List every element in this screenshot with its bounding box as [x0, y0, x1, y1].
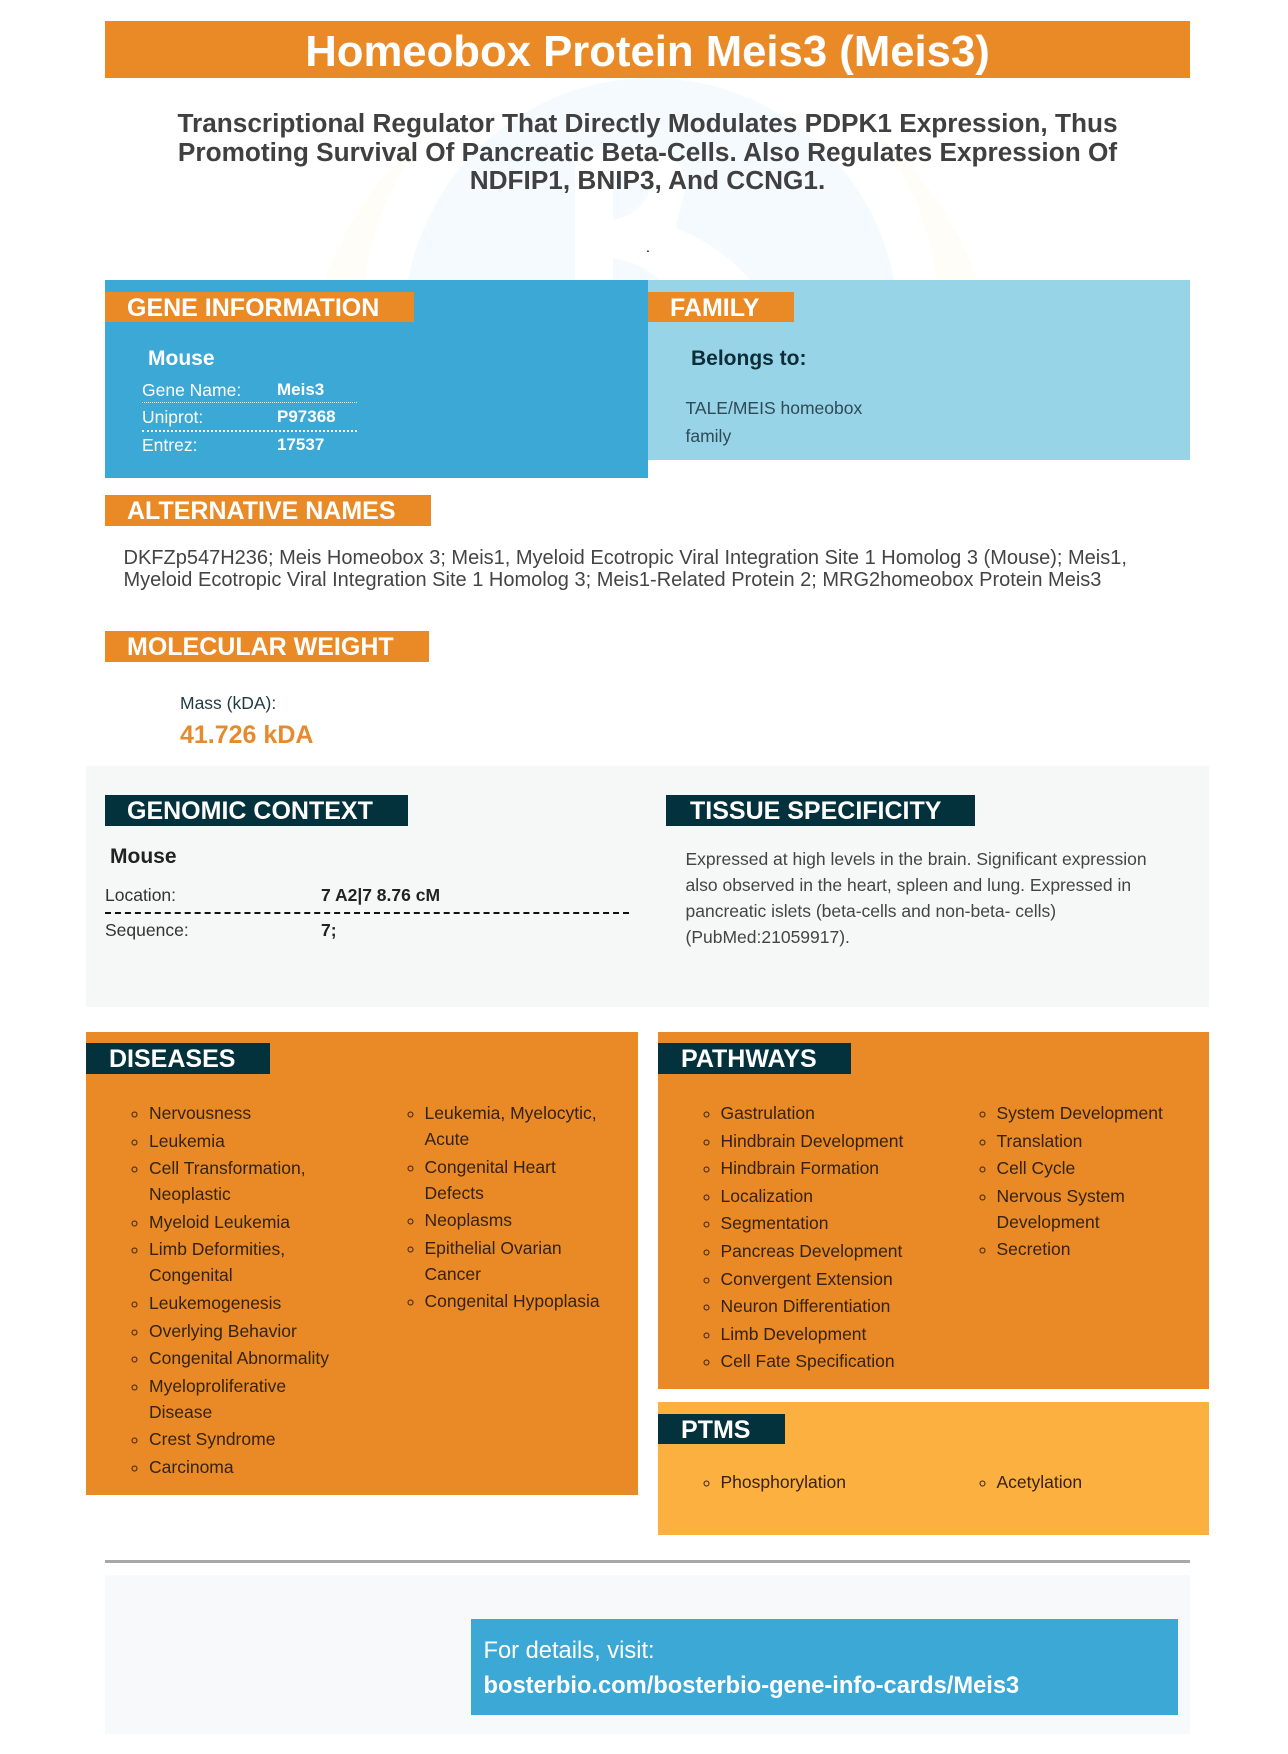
list: pathways column 1 [704, 1103, 904, 1371]
list: pathways column 2: Cell Cycle [996, 1158, 1075, 1178]
gene name row: Gene Name: [142, 380, 241, 400]
list: diseases column 1: Carcinoma [149, 1457, 234, 1477]
heading: genomic context: GENOMIC CONTEXT [127, 797, 373, 825]
title banner [105, 21, 1190, 78]
list: diseases column 2: Neoplasms [424, 1210, 512, 1230]
panel: gene information [105, 280, 648, 478]
alternative names text: Myeloid Ecotropic Viral Integration Site 1 Homolog 3; Meis1-Related Protein 2; MRG2homeobox Protein Meis3 [124, 569, 1101, 591]
list: pathways column 1: Hindbrain Formation [720, 1158, 879, 1178]
heading: pathways [658, 1043, 851, 1074]
species label: Mouse [148, 347, 215, 370]
sequence row: 7; [321, 920, 337, 940]
list: pathways column 1: Segmentation [720, 1213, 828, 1233]
list: pathways column 1: Gastrulation [720, 1103, 815, 1123]
location row [105, 882, 629, 914]
location row: Location: [105, 885, 176, 905]
family text: family [686, 426, 731, 446]
heading: tissue specificity: TISSUE SPECIFICITY [690, 797, 941, 825]
tissue specificity text [686, 849, 1147, 947]
heading: molecular weight: MOLECULAR WEIGHT [127, 633, 394, 661]
subtitle: Promoting Survival Of Pancreatic Beta-Cells. Also Regulates Expression Of [178, 137, 1117, 167]
list: diseases column 1: Myeloid Leukemia [149, 1212, 290, 1232]
mass label: Mass (kDA): [180, 693, 276, 713]
entrez row: 17537 [277, 435, 324, 454]
entrez row: Entrez: [142, 435, 197, 455]
list: diseases column 2: Congenital Heart Defects [424, 1157, 556, 1203]
callout: details link [471, 1619, 1178, 1715]
list: diseases column 1: Leukemia [149, 1131, 225, 1151]
list: pathways column 1: Cell Fate Specification [720, 1351, 895, 1371]
list: pathways column 2 [980, 1103, 1163, 1259]
list: diseases column 2: Epithelial Ovarian Cancer [424, 1238, 562, 1284]
heading: PTMs: PTMS [681, 1416, 750, 1444]
background watermark logo [408, 78, 894, 280]
family text: TALE/MEIS homeobox [686, 398, 862, 418]
list: pathways column 2: Nervous System Development [996, 1186, 1125, 1232]
list: pathways column 1: Convergent Extension [720, 1269, 893, 1289]
footer divider [105, 1560, 1190, 1563]
gene name row [142, 377, 357, 403]
belongs to label: Belongs to: [691, 347, 806, 370]
list: diseases column 1: Crest Syndrome [149, 1429, 275, 1449]
tissue specificity text: (PubMed:21059917). [686, 927, 850, 947]
list: pathways column 1: Neuron Differentiation [720, 1296, 890, 1316]
panel: genomic context and tissue specificity [86, 766, 1209, 1007]
heading: family: FAMILY [670, 294, 759, 322]
uniprot row [142, 404, 357, 432]
list: diseases column 1: Leukemogenesis [149, 1293, 281, 1313]
heading: PTMs [658, 1414, 785, 1444]
heading: diseases [86, 1043, 270, 1074]
list: diseases column 1: Nervousness [149, 1103, 251, 1123]
callout url: bosterbio.com/bosterbio-gene-info-cards/Meis3 [484, 1673, 1019, 1699]
location row: 7 A2|7 8.76 cM [321, 885, 440, 905]
list: diseases column 1: Cell Transformation, Neoplastic [149, 1158, 306, 1204]
family text [686, 398, 862, 446]
alternative names text: DKFZp547H236; Meis Homeobox 3; Meis1, Myeloid Ecotropic Viral Integration Site 1 Homolog 3 (Mouse); Meis1, [124, 547, 1127, 569]
uniprot row: P97368 [277, 407, 336, 426]
list: PTMs column 2: Acetylation [996, 1472, 1082, 1492]
list: PTMs column 1: Phosphorylation [720, 1472, 846, 1492]
species label: Mouse [110, 845, 177, 868]
small dot text: . [646, 239, 650, 255]
list: diseases column 1: Limb Deformities, Congenital [149, 1239, 285, 1285]
heading: alternative names: ALTERNATIVE NAMES [127, 497, 396, 525]
subtitle: Transcriptional Regulator That Directly Modulates PDPK1 Expression, Thus [177, 108, 1118, 138]
panel: family [648, 280, 1190, 460]
heading: pathways: PATHWAYS [681, 1045, 817, 1073]
panel: footer [105, 1575, 1190, 1734]
subtitle: NDFIP1, BNIP3, And CCNG1. [470, 165, 825, 195]
alternative names text [124, 547, 1127, 591]
list: pathways column 1: Localization [720, 1186, 813, 1206]
tissue specificity text: also observed in the heart, spleen and lung. Expressed in [686, 875, 1131, 895]
tissue specificity text: pancreatic islets (beta-cells and non-beta- cells) [686, 901, 1056, 921]
list: pathways column 1: Hindbrain Development [720, 1131, 903, 1151]
list: pathways column 2: System Development [996, 1103, 1163, 1123]
list: pathways column 2: Secretion [996, 1239, 1070, 1259]
list: diseases column 1: Congenital Abnormality [149, 1348, 329, 1368]
panel: diseases [86, 1032, 638, 1495]
heading: family [648, 292, 794, 322]
tissue specificity text: Expressed at high levels in the brain. Significant expression [686, 849, 1147, 869]
uniprot row: Uniprot: [142, 407, 203, 427]
entrez row [142, 435, 324, 455]
gene name row: Meis3 [277, 380, 324, 399]
heading: gene information: GENE INFORMATION [127, 294, 379, 322]
list: diseases column 1: Overlying Behavior [149, 1321, 297, 1341]
list: diseases column 1 [132, 1103, 329, 1477]
callout label: For details, visit: [484, 1638, 655, 1664]
title text: Homeobox Protein Meis3 (Meis3) [305, 27, 990, 76]
panel: pathways [658, 1032, 1209, 1389]
subtitle [177, 108, 1118, 195]
mass value: 41.726 kDA [180, 721, 313, 749]
sequence row: Sequence: [105, 920, 189, 940]
list: pathways column 1: Pancreas Development [720, 1241, 902, 1261]
list: pathways column 1: Limb Development [720, 1324, 866, 1344]
list: diseases column 2: Congenital Hypoplasia [424, 1291, 600, 1311]
panel: PTMs [658, 1402, 1209, 1535]
list: diseases column 2 [408, 1103, 600, 1311]
sequence row [105, 920, 337, 940]
heading: diseases: DISEASES [109, 1045, 235, 1073]
list: diseases column 1: Myeloproliferative Disease [149, 1376, 286, 1422]
list: pathways column 2: Translation [996, 1131, 1082, 1151]
list: diseases column 2: Leukemia, Myelocytic, Acute [424, 1103, 597, 1149]
